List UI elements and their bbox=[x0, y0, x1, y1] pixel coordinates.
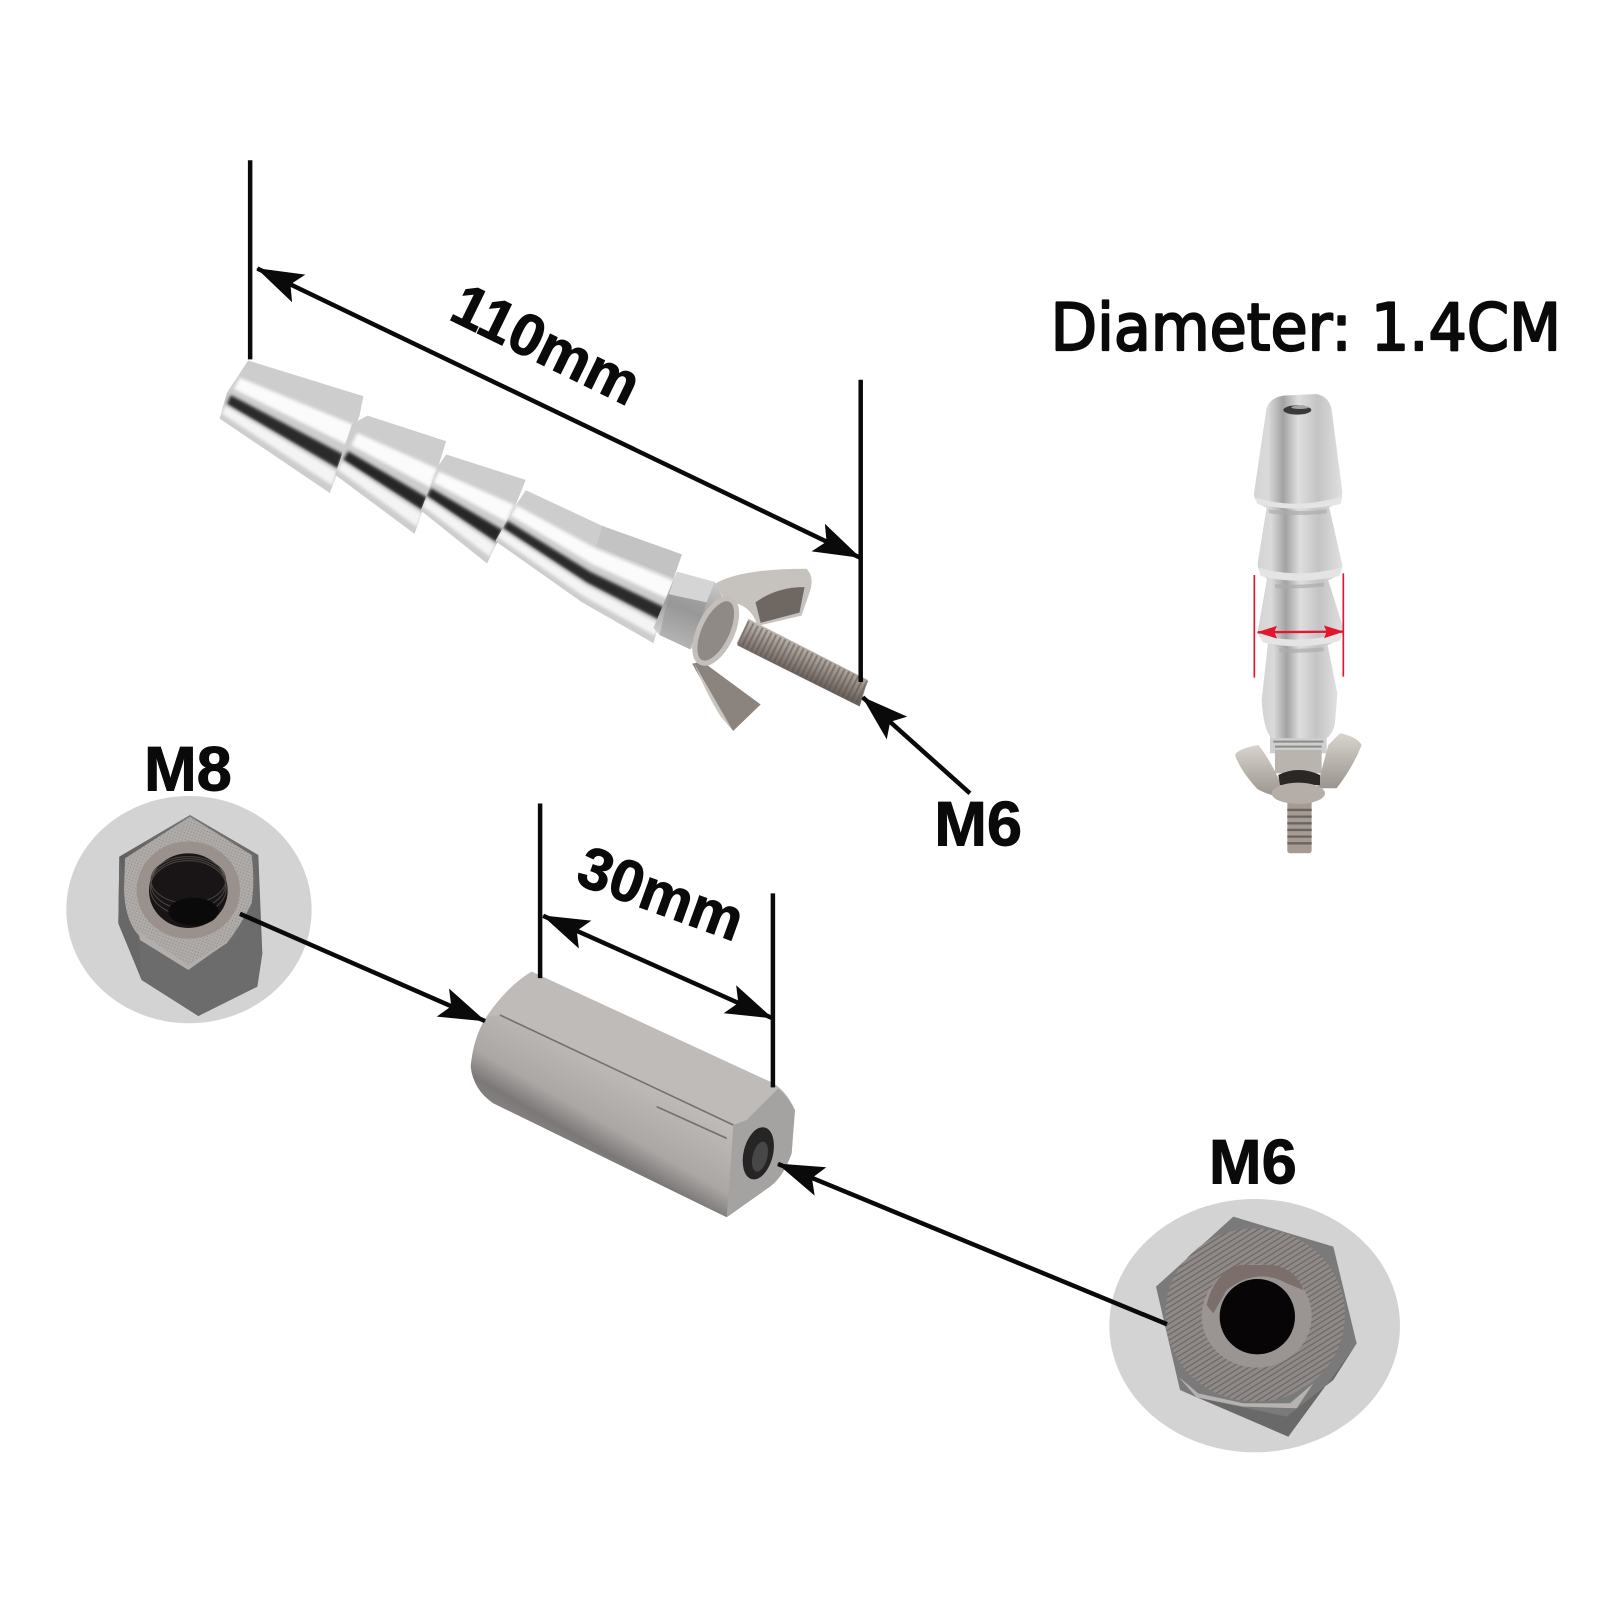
arrow: M6 screw pointer bbox=[863, 697, 970, 793]
label: 110mm: 110mm bbox=[441, 270, 651, 418]
infographic canvas bbox=[66, 160, 1556, 1452]
icon: M6 hex nut bbox=[1156, 1217, 1357, 1437]
icon: hex coupler body bbox=[471, 972, 795, 1217]
grey circle behind M6 nut bbox=[1109, 1199, 1400, 1452]
arrow: 110mm length bbox=[257, 269, 860, 557]
icon: probe segment 3 bbox=[421, 454, 526, 564]
panel: angled probe bbox=[144, 160, 1561, 1324]
icon: wing nut hub bbox=[686, 593, 745, 669]
icon: wing nut bottom wing bbox=[692, 662, 761, 731]
arrow: M8 end to coupler bbox=[240, 914, 485, 1021]
panel: vertical probe with diameter mark bbox=[1235, 394, 1362, 853]
panel: M8 end view bbox=[66, 796, 312, 1023]
label: diameter: Diameter: 1.4CM bbox=[1051, 290, 1561, 366]
arrow: M6 end to coupler bbox=[778, 1164, 1167, 1324]
label: M6 end: M6 bbox=[1209, 1127, 1297, 1197]
icon: probe segment 2 bbox=[335, 416, 446, 534]
dimension lines for 30mm bbox=[540, 804, 773, 1087]
icon: wing nut top wing bbox=[715, 569, 812, 626]
panel: M6 end view bbox=[1109, 1199, 1400, 1452]
arrow: 30mm length bbox=[543, 916, 772, 1018]
icon: probe segment 1 bbox=[220, 360, 363, 493]
icon: lock nut bbox=[653, 572, 723, 649]
label: 30mm: 30mm bbox=[569, 832, 753, 954]
red diameter lines and arrow bbox=[1254, 573, 1343, 678]
label: M6 screw: M6 bbox=[934, 789, 1022, 859]
icon: probe segment 4 bbox=[495, 490, 682, 643]
icon: threaded screw bbox=[737, 619, 868, 707]
panel: coupler nut bbox=[471, 972, 795, 1217]
icon: M8 hex nut bbox=[118, 815, 262, 1016]
label: M8: M8 bbox=[144, 734, 232, 804]
dimension lines for 110mm bbox=[250, 160, 861, 682]
grey circle behind M8 nut bbox=[66, 796, 312, 1023]
icon: aluminium probe body bbox=[1254, 394, 1343, 753]
icon: wing nut and screw bbox=[1235, 733, 1362, 853]
